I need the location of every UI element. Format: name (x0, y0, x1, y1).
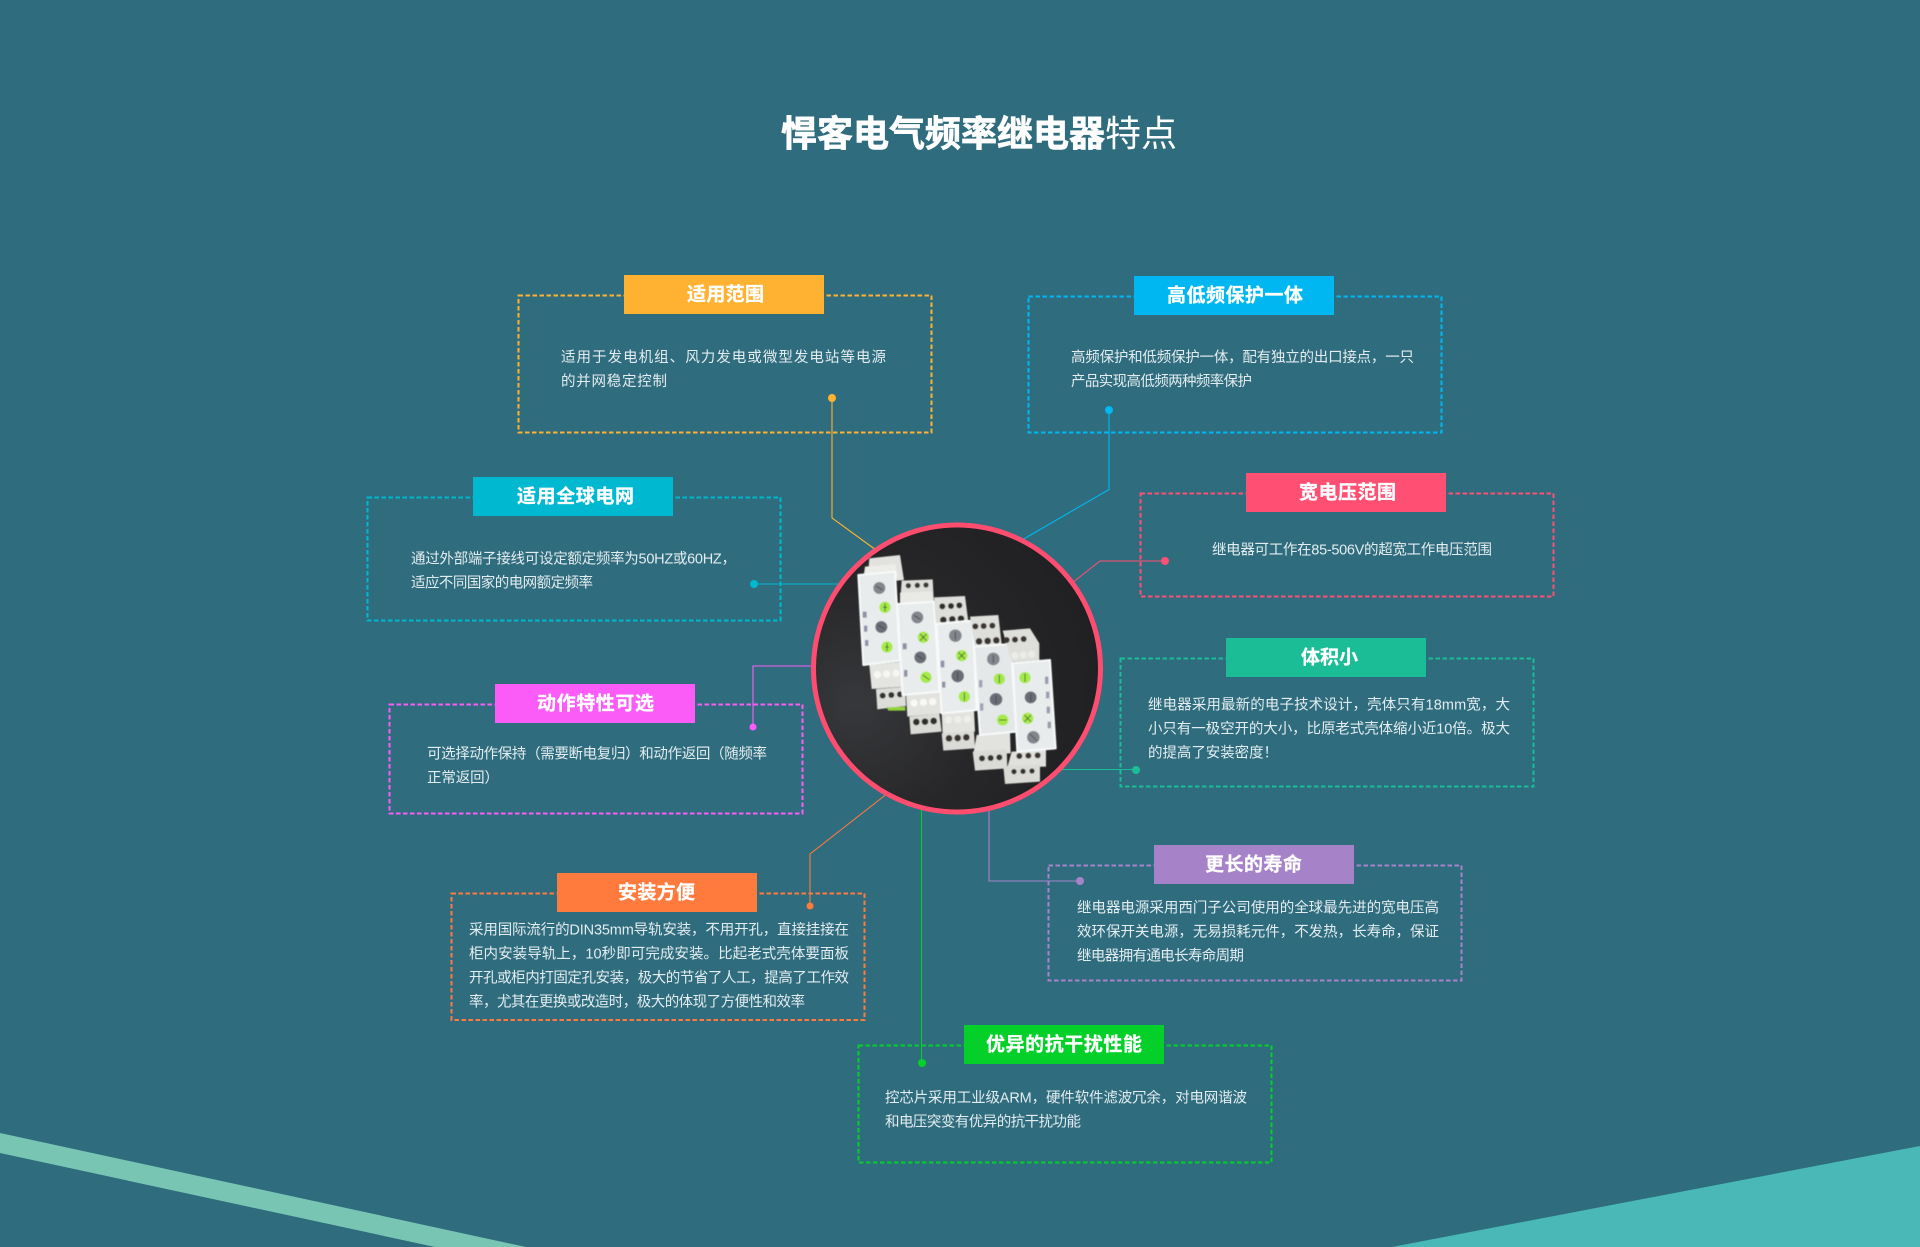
label: 宽电压范围: 宽电压范围 (1299, 480, 1396, 504)
dashed frame (1120, 658, 1534, 786)
body text (469, 922, 850, 1010)
body text: 适用于发电机组、风力发电或微型发电站等电源 (561, 348, 886, 366)
body text: 效环保开关电源，无易损耗元件，不发热，长寿命，保证 (1077, 922, 1439, 940)
body text: 采用国际流行的DIN35mm导轨安装，不用开孔，直接挂接在 (469, 922, 849, 938)
body text: 开孔或柜内打固定孔安装，极大的节省了人工，提高了工作效 (469, 970, 850, 986)
body text: 率，尤其在更换或改造时，极大的体现了方便性和效率 (469, 994, 805, 1010)
decorative triangle: bottom right (1392, 1146, 1920, 1247)
label: 动作特性可选 (495, 684, 695, 723)
label: 高低频保护一体 (1134, 276, 1334, 315)
label: 体积小 (1226, 638, 1426, 677)
dashed frame (452, 894, 864, 1020)
body text: 继电器电源采用西门子公司使用的全球最先进的宽电压高 (1077, 898, 1439, 916)
relay 1 (858, 555, 906, 711)
label: 适用范围: 适用范围 (687, 284, 764, 306)
dashed frame (390, 704, 802, 814)
body text: 的并网稳定控制 (561, 373, 667, 390)
label: 安装方便: 安装方便 (618, 880, 695, 904)
relay 5 (1003, 628, 1056, 784)
connector: 适用范围 (828, 394, 876, 550)
relay 3 (934, 596, 977, 751)
body text: 高频保护和低频保护一体，配有独立的出口接点，一只 (1071, 349, 1414, 366)
body text (885, 1088, 1248, 1130)
decorative stripe: bottom left (0, 1133, 526, 1247)
dashed frame (1140, 494, 1554, 596)
panel: 宽电压范围 (1140, 473, 1554, 596)
body text: 小只有一极空开的大小，比原老式壳体缩小近10倍。极大 (1148, 720, 1510, 738)
relay 4 (970, 615, 1017, 771)
dashed frame (518, 296, 932, 432)
dashed frame (1048, 866, 1462, 980)
label: 更长的寿命: 更长的寿命 (1205, 852, 1302, 876)
body text (1071, 349, 1414, 390)
panel: 适用全球电网 (368, 477, 780, 620)
label: 更长的寿命 (1154, 845, 1354, 884)
label: 动作特性可选: 动作特性可选 (537, 692, 654, 714)
connector: 体积小 (1055, 766, 1140, 774)
panel: 适用范围 (518, 275, 932, 432)
connector: 适用全球电网 (750, 580, 845, 588)
panel: 优异的抗干扰性能 (858, 1025, 1272, 1162)
central photo: relays in ring (814, 525, 1100, 812)
label: 适用范围 (624, 275, 824, 314)
body text: 适应不同国家的电网额定频率 (411, 574, 593, 592)
body text: 继电器拥有通电长寿命周期 (1077, 946, 1244, 964)
body text: 继电器可工作在85-506V的超宽工作电压范围 (1212, 542, 1492, 558)
relay group (858, 555, 1056, 784)
connector: 宽电压范围 (1072, 557, 1169, 583)
connector: 安装方便 (806, 793, 888, 910)
body text (1077, 898, 1439, 964)
body text: 正常返回） (427, 770, 499, 786)
label: 适用全球电网: 适用全球电网 (517, 484, 634, 508)
body text: 通过外部端子接线可设定额定频率为50HZ或60HZ， (411, 550, 736, 568)
label: 体积小: 体积小 (1301, 646, 1358, 668)
body text: 继电器采用最新的电子技术设计，壳体只有18mm宽，大 (1148, 696, 1510, 714)
label: 优异的抗干扰性能: 优异的抗干扰性能 (986, 1032, 1142, 1056)
connector: 优异的抗干扰性能 (918, 805, 926, 1067)
title: 悍客电气频率继电器特点 (781, 113, 1177, 154)
body text (561, 348, 886, 390)
panel: 高低频保护一体 (1028, 276, 1442, 432)
connector: 动作特性可选 (750, 666, 815, 730)
label: 优异的抗干扰性能 (964, 1025, 1164, 1064)
panel: 体积小 (1120, 638, 1534, 786)
body text (411, 550, 736, 592)
label: 宽电压范围 (1246, 473, 1446, 512)
connector: 高低频保护一体 (1022, 406, 1113, 540)
body text: 产品实现高低频两种频率保护 (1071, 373, 1252, 390)
body text (427, 744, 767, 786)
photo background disc with ring (814, 525, 1100, 812)
body text: 和电压突变有优异的抗干扰功能 (885, 1114, 1081, 1130)
body text: 可选择动作保持（需要断电复归）和动作返回（随频率 (427, 744, 767, 762)
dashed frame (858, 1046, 1272, 1162)
dashed frame (368, 498, 780, 620)
body text: 的提高了安装密度！ (1148, 744, 1278, 762)
body text (1148, 696, 1510, 762)
connector: 更长的寿命 (989, 805, 1084, 885)
label: 适用全球电网 (473, 477, 673, 516)
body text: 柜内安装导轨上，10秒即可完成安装。比起老式壳体要面板 (469, 944, 850, 962)
panel: 动作特性可选 (390, 684, 802, 814)
panel: 安装方便 (452, 873, 864, 1020)
label: 安装方便 (557, 873, 757, 912)
panel: 更长的寿命 (1048, 845, 1462, 980)
relay 2 (897, 579, 942, 734)
body text: 控芯片采用工业级ARM，硬件软件滤波冗余，对电网谐波 (885, 1088, 1248, 1106)
label: 高低频保护一体: 高低频保护一体 (1167, 284, 1303, 306)
dashed frame (1028, 296, 1442, 432)
